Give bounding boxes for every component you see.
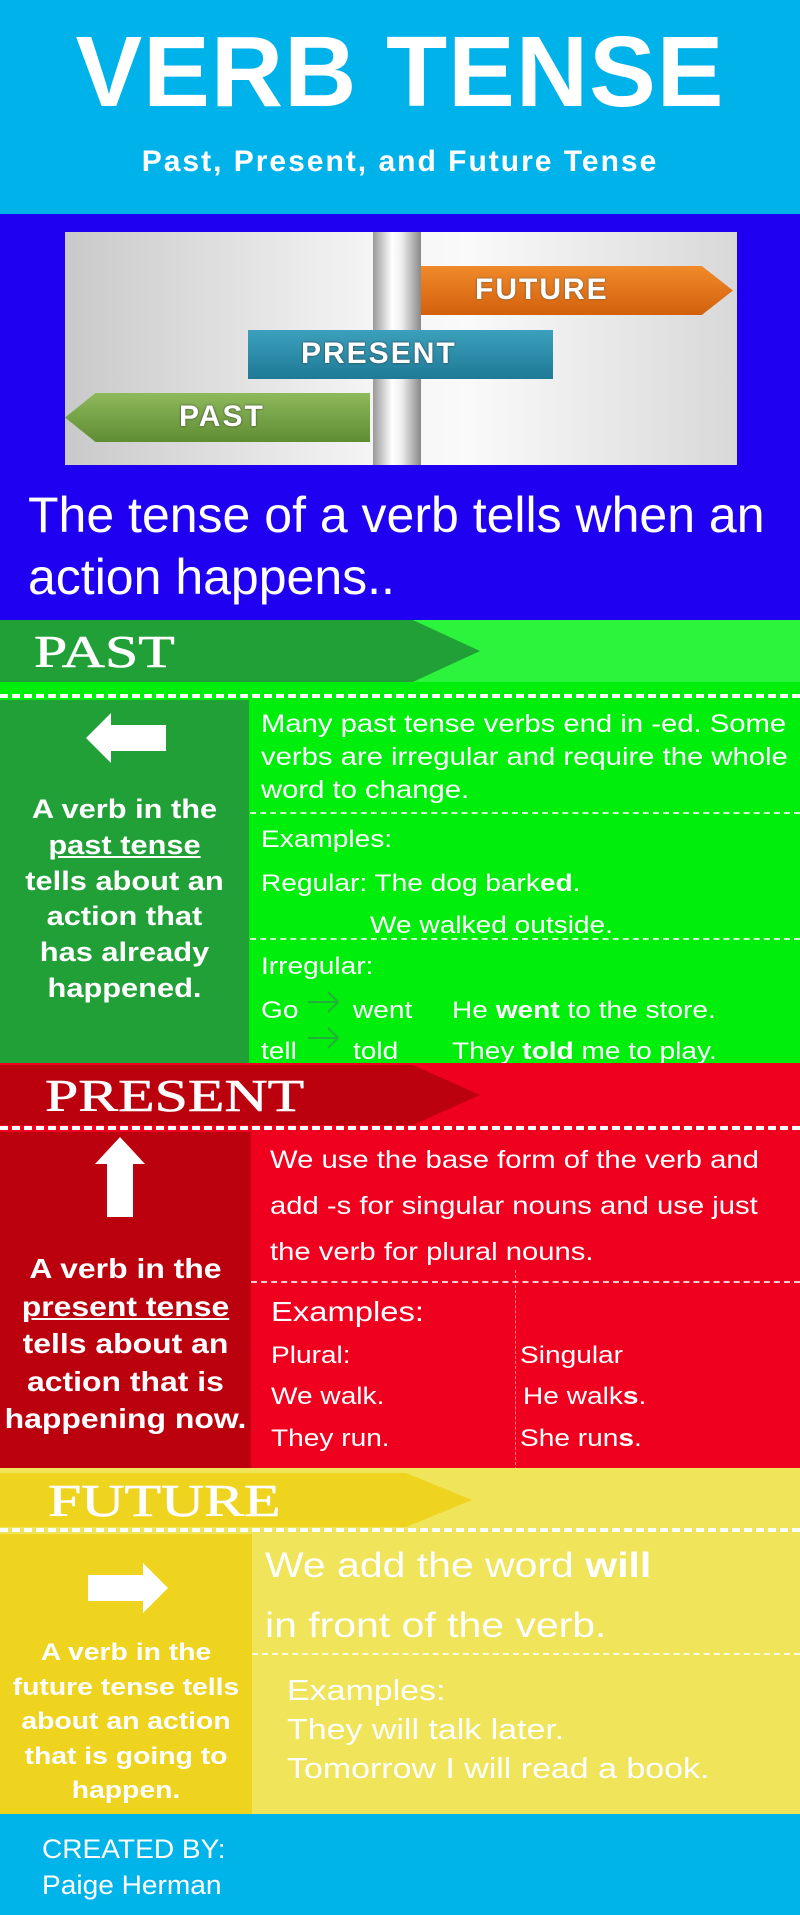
panel: future [0,1468,800,1814]
present explanation: We use the base form of the verb and [270,1146,759,1174]
present explanation [270,1146,759,1266]
credit [42,1834,226,1900]
credit: CREATED BY: [42,1834,226,1864]
future definition: future tense tells [13,1674,239,1700]
present definition: action that is [27,1366,224,1396]
present explanation: add -s for singular nouns and use just [270,1192,758,1220]
past definition: tells about an [25,866,224,896]
future explanation: in front of the verb. [265,1606,606,1645]
past examples: He went to the store. [452,997,716,1024]
signpost image [65,232,737,465]
icon: up arrow [95,1137,145,1217]
panel: past [0,620,800,1063]
past definition [25,794,224,1003]
past examples: Examples: [261,826,392,853]
future definition: about an action [21,1708,231,1735]
past examples [250,826,800,1065]
title: VERB TENSE [75,16,724,128]
future definition: that is going to [25,1742,227,1770]
future explanation [265,1546,651,1645]
past examples: Regular: The dog barked. [261,870,580,897]
header [0,0,800,214]
present examples: She runs. [520,1425,642,1452]
future examples: Examples: [287,1675,445,1707]
past definition: action that [47,901,202,931]
future header: FUTURE [48,1475,281,1526]
present examples: He walks. [523,1383,646,1410]
future explanation: We add the word will [265,1546,651,1585]
past examples: went [353,997,412,1024]
present examples: Examples: [271,1296,424,1327]
present definition: A verb in the [29,1253,222,1284]
past examples: Irregular: [261,953,373,980]
credit: Paige Herman [42,1870,221,1900]
past header [0,620,480,682]
past definition: past tense [48,830,201,860]
past header: PAST [34,626,175,677]
present definition: tells about an [23,1328,228,1359]
icon: small arrows [308,991,340,1049]
past examples: They told me to play. [452,1038,717,1065]
past explanation: word to change. [261,776,469,804]
panel: present [0,1063,800,1468]
present definition: present tense [22,1290,229,1322]
future definition: happen. [72,1777,180,1804]
signpost image: PAST [179,400,265,433]
future examples: Tomorrow I will read a book. [287,1753,709,1785]
subtitle: Past, Present, and Future Tense [142,145,658,178]
past definition: happened. [48,973,201,1003]
signpost image: FUTURE [475,273,609,306]
future examples: They will talk later. [287,1714,564,1746]
icon: right arrow [88,1563,168,1613]
present examples: Plural: [271,1342,351,1369]
past examples: We walked outside. [370,912,613,939]
past examples: told [353,1038,398,1065]
past explanation [261,710,788,804]
future examples [287,1675,709,1785]
icon: left arrow [86,713,166,763]
present definition [5,1253,246,1434]
past examples: Go [261,997,298,1024]
present examples [271,1296,646,1452]
signpost image: PRESENT [301,337,457,370]
footer [0,1814,800,1915]
present examples: They run. [271,1425,390,1452]
past explanation: Many past tense verbs end in -ed. Some [261,710,786,738]
future header [0,1473,472,1527]
intro panel [0,214,800,620]
past definition: has already [40,937,209,967]
present definition: happening now. [5,1403,246,1434]
present examples: We walk. [271,1383,384,1410]
present explanation: the verb for plural nouns. [270,1238,594,1266]
past examples: tell [261,1038,297,1065]
present header: PRESENT [45,1070,304,1121]
present examples: Singular [520,1342,623,1369]
intro text: The tense of a verb tells when an action happens.. [28,487,765,605]
future definition: A verb in the [41,1639,211,1666]
present header [0,1065,480,1125]
past definition: A verb in the [32,794,217,824]
past explanation: verbs are irregular and require the whole [261,743,788,771]
future definition [13,1639,239,1804]
